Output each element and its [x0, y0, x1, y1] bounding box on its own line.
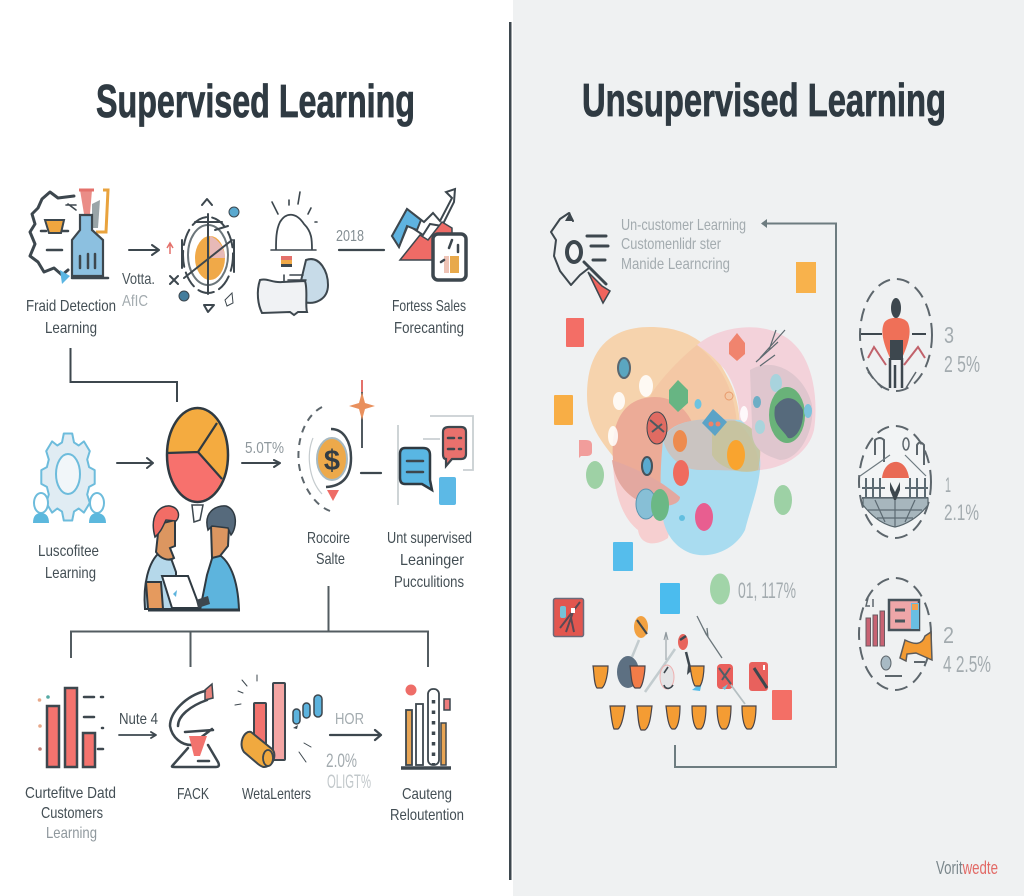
text: 2 / 42.5%: 2 — [943, 622, 954, 648]
text: 2.0% stats: 2.0% — [326, 751, 357, 772]
text: 5.0T%: 5.0T% — [245, 440, 284, 457]
connector line — [339, 249, 384, 251]
label: unt supervised: Unt supervised — [387, 530, 472, 547]
icon: pie chart bubble — [167, 408, 228, 522]
arrow — [117, 458, 153, 468]
icon: fraud detection gear and flask — [30, 190, 108, 284]
text: 2 / 42.5% — [943, 622, 991, 677]
text: customer learning: Manide Learncring — [621, 256, 730, 273]
label: luscofitee learning: Learning — [45, 565, 96, 582]
text: 3 / 2.5%: 2 5% — [944, 351, 980, 377]
tree connector — [71, 586, 428, 667]
arrow — [330, 730, 381, 740]
text: 01, 117%: 01, 117% — [738, 578, 796, 603]
arrow — [119, 732, 156, 738]
connector arrow — [675, 224, 836, 767]
label: luscofitee learning: Luscofitee — [38, 543, 99, 560]
icon: dashboard in dashed circle — [859, 578, 932, 690]
label: unt supervised: Leaninger — [400, 552, 465, 569]
text: 3 / 2.5% — [944, 322, 980, 377]
decision tree — [554, 598, 768, 730]
arrow — [242, 460, 280, 467]
label: rocoire salte: Salte — [316, 551, 345, 568]
icon: retention building chart — [401, 684, 451, 768]
label: fortess sales forecasting: Fortess Sales — [392, 298, 466, 315]
label: FACK: FACK — [177, 786, 209, 803]
logo: Voritwedte — [936, 858, 998, 878]
label: fortess sales forecasting — [392, 298, 466, 337]
label: rocoire salte — [307, 530, 350, 568]
icon: cloud and head — [258, 192, 328, 315]
label: fraud detection: Fraid Detection — [26, 298, 116, 315]
connector to pie — [70, 348, 177, 402]
label: customers learning: Curtefitve Datd — [25, 785, 116, 802]
label: customers learning: Learning — [46, 825, 97, 842]
label: fortess sales forecasting: Forecanting — [394, 320, 464, 337]
text: 2.0% stats — [326, 751, 371, 793]
label: customer retention: Cauteng — [402, 786, 452, 803]
label: wetalenters: WetaLenters — [242, 786, 311, 803]
venn cluster — [579, 327, 816, 555]
label: customers learning — [25, 785, 116, 842]
arrow — [129, 245, 159, 255]
text: 1 / 2.1%: 2.1% — [944, 500, 979, 525]
text: customer learning: Customenlidr ster — [621, 236, 722, 253]
text: vata: AfIC — [122, 293, 148, 310]
icon: crowd in dashed circle — [859, 426, 931, 538]
label: luscofitee learning — [38, 543, 99, 582]
text: HOR: HOR — [335, 711, 364, 728]
title: supervised learning: Supervised Learning — [96, 75, 415, 127]
icon: FACK flask — [170, 684, 219, 767]
icon: customer bar chart — [38, 688, 103, 767]
icon: wetalenters bars — [235, 675, 322, 767]
label: fraud detection: Learning — [45, 320, 97, 337]
text: 3 / 2.5%: 3 — [944, 322, 954, 348]
icon: chat bubbles — [398, 416, 473, 505]
icon: radial target — [170, 199, 239, 312]
text: 01, 117% — [710, 574, 796, 604]
icon: gear with users — [33, 434, 106, 523]
cups — [593, 666, 756, 730]
label: rocoire salte: Rocoire — [307, 530, 350, 547]
squares — [554, 262, 816, 720]
cluster dots — [579, 330, 812, 531]
arrow head — [761, 219, 767, 228]
text: 1 / 2.1% — [944, 474, 979, 525]
icon: dollar coin: $ — [324, 445, 340, 477]
icon: small red arrow — [167, 243, 173, 254]
text: vata: Votta. — [122, 271, 155, 288]
icon: dollar coin — [298, 380, 375, 511]
label: customer retention: Reloutention — [390, 807, 464, 824]
icon: person in dashed circle — [860, 279, 932, 391]
right person — [200, 506, 239, 610]
text: 2 / 42.5%: 4 2.5% — [943, 651, 991, 677]
label: fraud detection — [26, 298, 116, 337]
text: nute 4: Nute 4 — [119, 711, 158, 728]
panel: unsupervised learning — [551, 212, 998, 878]
label: customers learning: Customers — [41, 805, 103, 822]
text: 1 / 2.1%: 1 — [945, 474, 951, 497]
text: 2018: 2018 — [336, 228, 364, 245]
left person — [145, 506, 178, 609]
icon: two people with laptop — [145, 506, 240, 610]
text: customer learning: Un-customer Learning — [621, 217, 746, 234]
divider — [509, 22, 512, 880]
label: customer retention — [390, 786, 464, 824]
text: vata — [122, 271, 155, 310]
icon: magnifier gear — [551, 212, 610, 303]
label: unt supervised: Pucculitions — [394, 574, 464, 591]
text: customer learning — [621, 217, 746, 273]
panel: unsupervised background — [513, 0, 1024, 896]
panel: supervised learning — [25, 189, 473, 842]
text: 2.0% stats: OLIGT% — [327, 772, 371, 793]
icon: sales forecast chart — [392, 189, 466, 280]
connector line — [361, 472, 381, 474]
label: unt supervised — [387, 530, 472, 591]
